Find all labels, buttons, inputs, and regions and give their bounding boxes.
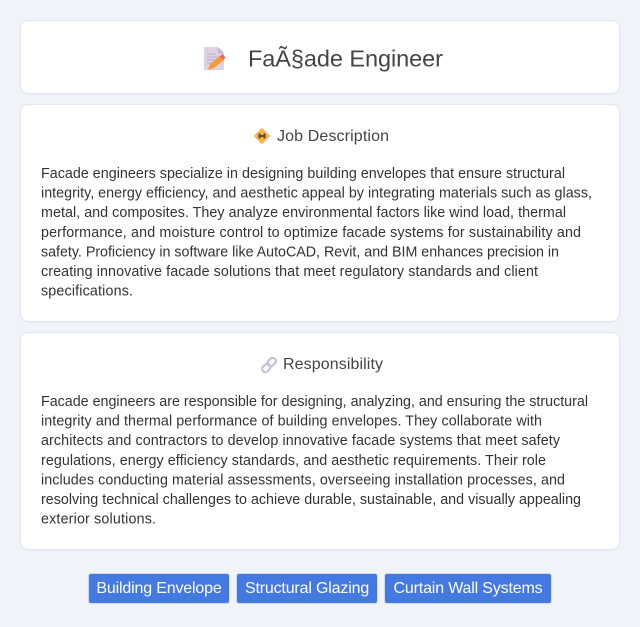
text block: responsibility	[41, 394, 588, 528]
text block: job description: specifications.	[41, 284, 133, 300]
tag: building envelope	[89, 574, 229, 603]
tag: structural glazing	[237, 574, 377, 603]
title: FaÃ§ade Engineer	[248, 46, 443, 72]
panel: job description	[20, 104, 620, 322]
text block: job description	[41, 166, 592, 300]
heading: job description: Job Description	[277, 128, 389, 145]
text block: job description: safety. Proficiency in software like AutoCAD, Revit, and BIM enhances precision in	[41, 244, 559, 260]
text block: job description: integrity, energy efficiency, and aesthetic appeal by integrating materials such as glass,	[41, 186, 592, 202]
text block: responsibility: resolving technical challenges to achieve durable, sustainable, and visually appealing	[41, 492, 581, 508]
text block: job description: metal, and composites. They analyze environmental factors like wind load, thermal	[41, 205, 566, 221]
tag: curtain wall systems: Curtain Wall Systems	[394, 580, 542, 597]
text block: responsibility: exterior solutions.	[41, 512, 156, 528]
heading: responsibility: Responsibility	[283, 356, 383, 373]
text block: responsibility: includes conducting material assessments, overseeing installation processes, and	[41, 472, 565, 488]
panel: responsibility	[20, 332, 620, 550]
text block: responsibility: regulations, energy efficiency standards, and aesthetic requirements. Their role	[41, 453, 546, 469]
text block: job description: performance, and moisture control to optimize facade systems for sustainability and	[41, 225, 581, 241]
tag: curtain wall systems	[385, 574, 551, 603]
text block: job description: creating innovative facade solutions that meet regulatory standards and client	[41, 264, 538, 280]
panel: title card	[20, 20, 620, 94]
text block: responsibility: architects and contractors to develop innovative facade systems that meet safety	[41, 433, 561, 449]
tag: structural glazing: Structural Glazing	[245, 580, 369, 597]
icon: orange diamond sign	[254, 128, 270, 144]
text block: responsibility: integrity and thermal performance of building envelopes. They collaborate with	[41, 414, 542, 430]
icon: chain link	[261, 356, 277, 374]
tag: building envelope: Building Envelope	[96, 580, 222, 597]
text block: job description: Facade engineers specialize in designing building envelopes that ensure structural	[41, 166, 565, 182]
icon: document with pencil	[204, 47, 226, 70]
text block: responsibility: Facade engineers are responsible for designing, analyzing, and ensuring the structural	[41, 394, 588, 410]
